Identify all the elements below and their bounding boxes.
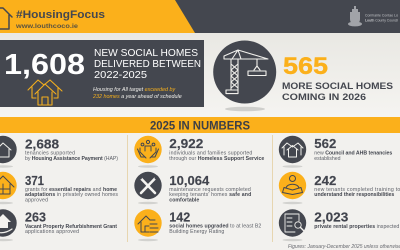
panel: homes delivered: [0, 40, 204, 107]
headline number: 1,608: [4, 49, 85, 81]
stat: tenant training: 242: [314, 174, 336, 188]
stat: repair grants: adaptations in privately owned homes: [25, 192, 118, 198]
stat: tenant training: [279, 172, 400, 204]
stat: vacant property grant: Vacant Property Refurbishment Grant: [25, 224, 117, 230]
icon: crane: [213, 40, 276, 111]
stat: repair grants: [0, 172, 118, 204]
delivered heading: 2022-2025: [94, 70, 147, 81]
council logo: Comhairle Contae Lú: [365, 14, 398, 18]
stat: vacant property grant: applications approved: [25, 229, 79, 235]
stat: homeless support: [134, 136, 264, 168]
stat: energy upgrades: 142: [169, 211, 190, 225]
icon: house outline: [0, 8, 12, 29]
stat: tenancies HAP: [0, 136, 118, 168]
stat: tenancies HAP: by Housing Assistance Payment (HAP): [25, 156, 118, 162]
delivered heading: NEW SOCIAL HOMES: [94, 48, 198, 59]
stat: vacant property grant: 263: [25, 211, 46, 225]
stat: maintenance requests: [134, 172, 251, 204]
website: www.louthcoco.ie: [15, 23, 79, 30]
upcoming label: COMING IN 2026: [282, 91, 366, 102]
upcoming number: 565: [283, 53, 328, 80]
stat: energy upgrades: [134, 209, 261, 241]
stat: tenant training: understand their responsibilities: [314, 192, 394, 198]
target note: Housing for All target exceeded by: [93, 87, 175, 93]
council logo: [348, 6, 398, 26]
stat: repair grants: 371: [25, 174, 44, 188]
stat: vacant property grant: [0, 209, 117, 241]
stat: repair grants: grants for essential repairs and home: [25, 187, 117, 193]
stat: homeless support: through our Homeless Support Service: [169, 156, 264, 162]
stat: new tenancies: established: [314, 156, 341, 162]
stat: rental inspections: private rental properties inspected: [314, 224, 399, 230]
council logo: Louth County Council: [365, 18, 398, 22]
stat: energy upgrades: Building Energy Rating: [169, 229, 224, 235]
delivered heading: DELIVERED BETWEEN: [94, 59, 201, 70]
stat: homeless support: individuals and families supported: [169, 150, 252, 156]
stat: tenancies HAP: 2,688: [25, 137, 59, 151]
stat: rental inspections: [279, 209, 399, 241]
stat: maintenance requests: comfortable: [169, 198, 199, 204]
stat: tenancies HAP: tenancies supported: [25, 150, 75, 156]
stat: new tenancies: 562: [314, 137, 336, 151]
stat: maintenance requests: 10,064: [169, 174, 209, 188]
target note: 232 homes a year ahead of schedule: [93, 94, 182, 100]
stat: maintenance requests: maintenance requests completed: [169, 187, 251, 193]
header banner: [0, 0, 400, 33]
stat: repair grants: approved: [25, 198, 48, 204]
hashtag heading: #HousingFocus: [16, 9, 105, 21]
icon: houses: [28, 80, 62, 105]
stat: homeless support: 2,922: [169, 137, 203, 151]
stat: tenant training: new tenants completed training to: [314, 187, 400, 193]
section heading: 2025 in numbers: [0, 117, 400, 133]
section heading: 2025 in numbers: 2025 IN NUMBERS: [150, 118, 250, 132]
stat: energy upgrades: social homes upgraded to at least B2: [169, 223, 261, 229]
upcoming label: MORE SOCIAL HOMES: [282, 80, 393, 91]
stat: new tenancies: [279, 136, 392, 168]
stat: new tenancies: new Council and AHB tenancies: [314, 150, 392, 156]
stat: maintenance requests: keeping tenants' homes safe and: [169, 192, 251, 198]
stat: rental inspections: 2,023: [314, 211, 348, 225]
